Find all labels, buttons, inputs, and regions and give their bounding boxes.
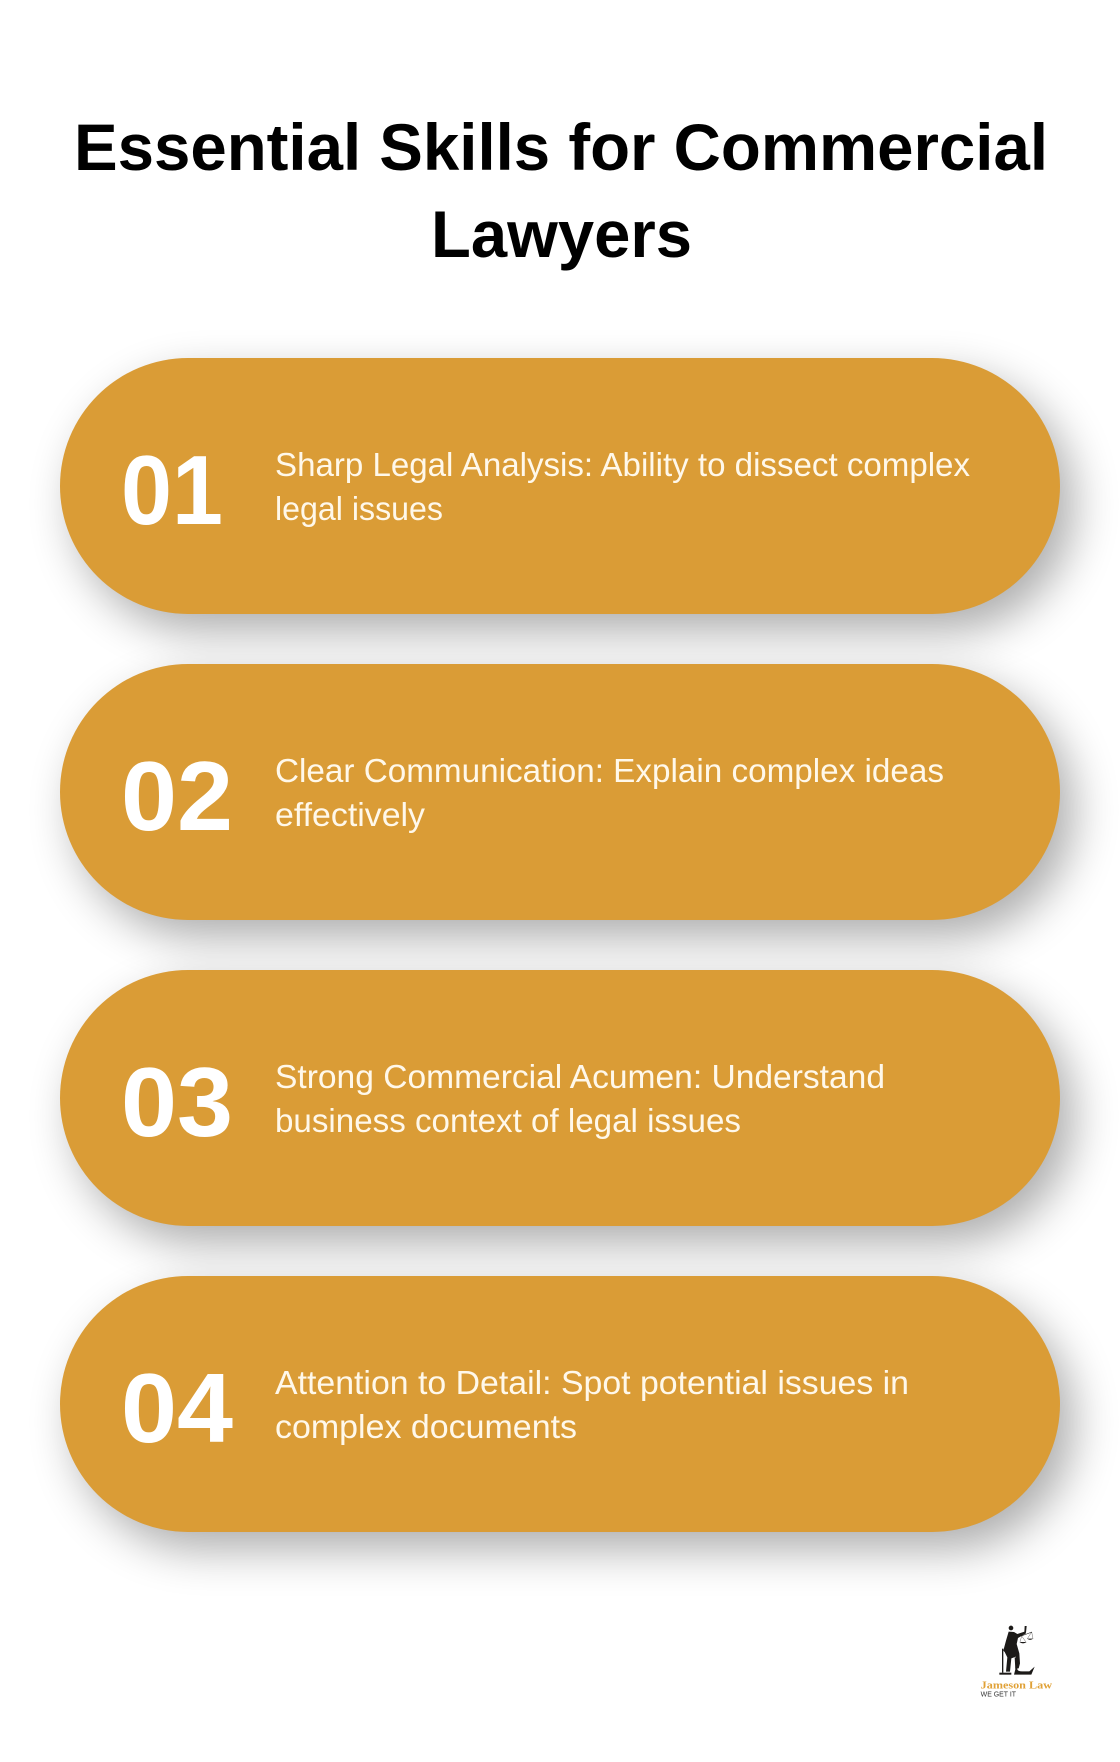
text: clear communication bbox=[275, 752, 944, 833]
text: sharp legal analysis: legal issues bbox=[275, 490, 443, 527]
panel: skill 04 bbox=[60, 1276, 1060, 1532]
text: sharp legal analysis: Sharp Legal Analysis: Ability to dissect complex bbox=[275, 446, 970, 483]
logo name: Jameson Law bbox=[981, 1679, 1052, 1691]
text: clear communication: effectively bbox=[275, 796, 426, 833]
number 03: 03 bbox=[121, 1047, 233, 1157]
logo: Jameson Law bbox=[980, 1626, 1052, 1698]
number 04: 04 bbox=[121, 1353, 233, 1463]
text: strong commercial acumen bbox=[275, 1058, 885, 1139]
icon: lady justice with L bbox=[999, 1626, 1035, 1675]
number 02: 02 bbox=[121, 741, 233, 851]
text: attention to detail: complex documents bbox=[275, 1408, 577, 1445]
title bbox=[74, 110, 1048, 271]
text: attention to detail bbox=[275, 1364, 909, 1445]
panel: skill 01 bbox=[60, 358, 1060, 614]
number 01: 01 bbox=[121, 435, 223, 545]
text: clear communication: Clear Communication: Explain complex ideas bbox=[275, 752, 944, 789]
text: attention to detail: Attention to Detail: Spot potential issues in bbox=[275, 1364, 909, 1401]
text: strong commercial acumen: business context of legal issues bbox=[275, 1102, 741, 1139]
text: sharp legal analysis bbox=[275, 446, 970, 527]
panel: skill 03 bbox=[60, 970, 1060, 1226]
logo tagline: WE GET IT bbox=[981, 1689, 1016, 1698]
text: strong commercial acumen: Strong Commercial Acumen: Understand bbox=[275, 1058, 885, 1095]
panel: skill 02 bbox=[60, 664, 1060, 920]
title: Essential Skills for Commercial bbox=[74, 110, 1048, 184]
title: Lawyers bbox=[431, 197, 692, 271]
